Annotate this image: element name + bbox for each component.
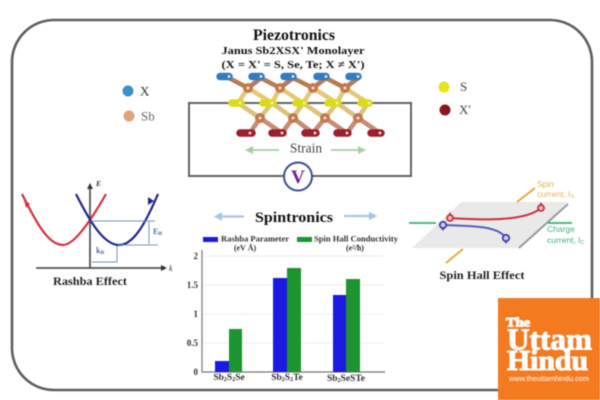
caption: Rashba Effect xyxy=(53,276,127,288)
Rashba effect band diagram: k xyxy=(96,246,100,255)
gridlines xyxy=(202,256,384,343)
x axis labels: 2 xyxy=(232,377,235,383)
strain label and arrows xyxy=(247,140,364,156)
voltmeter: V xyxy=(291,167,305,188)
Rashba effect band diagram: R xyxy=(100,250,105,256)
x axis labels: 2 xyxy=(224,377,227,383)
legend: X and Sb atoms: Sb xyxy=(141,108,155,124)
chart legend: Rashba Parameter xyxy=(221,234,289,244)
y axis labels: 1.5 xyxy=(187,280,198,290)
title: Piezotronics: (X = X' = S, Se, Te; X ≠ X') xyxy=(222,59,365,71)
bar chart xyxy=(187,234,398,384)
chart legend: (eV Å) xyxy=(234,244,256,252)
red path xyxy=(450,208,541,219)
chart legend: (e²/ħ) xyxy=(346,244,364,252)
title: Piezotronics: Janus Sb2XSX' Monolayer xyxy=(222,45,365,57)
logo: The Uttam Hindu: Hindu xyxy=(507,346,588,377)
x axis labels: Sb xyxy=(271,373,282,383)
blue path xyxy=(443,225,506,238)
legend: S and X' atoms: S xyxy=(460,79,467,94)
charge current label xyxy=(547,224,585,246)
legend: X and Sb atoms: X xyxy=(140,84,150,98)
voltmeter xyxy=(284,162,312,190)
Rashba effect band diagram: E xyxy=(95,179,101,188)
spin current label: S xyxy=(571,194,575,200)
title: Piezotronics: Piezotronics xyxy=(253,27,335,44)
legend: S and X' atoms: X' xyxy=(459,102,471,117)
plate xyxy=(412,202,568,248)
legend: X and Sb atoms xyxy=(122,84,155,124)
Sb2S2Te bars xyxy=(273,268,301,372)
Rashba effect band diagram: E xyxy=(153,227,158,236)
logo: The Uttam Hindu: Uttam xyxy=(507,322,592,356)
x axis labels: S xyxy=(285,373,290,383)
spin Hall effect diagram xyxy=(409,179,585,282)
caption: Spin Hall Effect xyxy=(440,270,525,282)
y axis labels xyxy=(187,251,198,377)
logo: The Uttam Hindu: www.theuttamhindu.com xyxy=(508,374,589,383)
x axis labels: Se xyxy=(235,373,245,383)
y axis labels: 1 xyxy=(194,309,198,319)
heading: Spintronics xyxy=(216,210,375,226)
legend: S and X' atoms xyxy=(438,79,471,117)
Sb2SeSTe bars xyxy=(333,279,360,372)
charge current label: Charge xyxy=(547,224,575,234)
x axis labels: SeSTe xyxy=(341,374,365,384)
x axis labels: Sb xyxy=(327,374,338,384)
spin current label: Spin xyxy=(537,179,554,189)
charge current lines xyxy=(409,222,572,224)
spin current label xyxy=(537,179,575,200)
Sb2S2Se bars xyxy=(215,329,242,372)
y axis labels: 0.5 xyxy=(187,338,198,348)
chart legend xyxy=(203,234,398,252)
x axis labels: 2 xyxy=(290,377,293,383)
axes xyxy=(36,186,164,268)
spin current label: current, I xyxy=(537,189,571,199)
chart axes xyxy=(202,250,385,372)
strain label and arrows: Strain xyxy=(290,140,322,156)
charge current label: C xyxy=(581,240,585,246)
logo: The Uttam Hindu xyxy=(498,298,600,400)
Rashba effect band diagram: k xyxy=(169,264,173,273)
Rashba effect band diagram xyxy=(22,179,173,288)
spin current lines xyxy=(446,188,535,263)
x axis labels xyxy=(213,373,365,384)
y axis labels: 2 xyxy=(194,251,198,261)
y axis labels: 0 xyxy=(194,367,198,377)
x axis labels: 2 xyxy=(282,377,285,383)
heading: Spintronics: Spintronics xyxy=(255,210,333,226)
title: Piezotronics xyxy=(222,27,365,71)
chart legend: Spin Hall Conductivity xyxy=(314,234,398,244)
Rashba effect band diagram: R xyxy=(158,231,163,237)
blue band xyxy=(76,194,158,245)
x axis labels: S xyxy=(227,373,232,383)
x axis labels: 2 xyxy=(338,378,341,384)
x axis labels: Te xyxy=(293,373,303,383)
logo: The Uttam Hindu: The xyxy=(506,314,530,330)
charge current label: current, I xyxy=(547,235,581,245)
red band xyxy=(22,194,106,245)
E_R and k_R dimensions xyxy=(91,221,158,262)
piezo circuit with voltmeter xyxy=(189,103,411,190)
x axis labels: Sb xyxy=(213,373,224,383)
Janus monolayer crystal structure xyxy=(220,75,381,134)
